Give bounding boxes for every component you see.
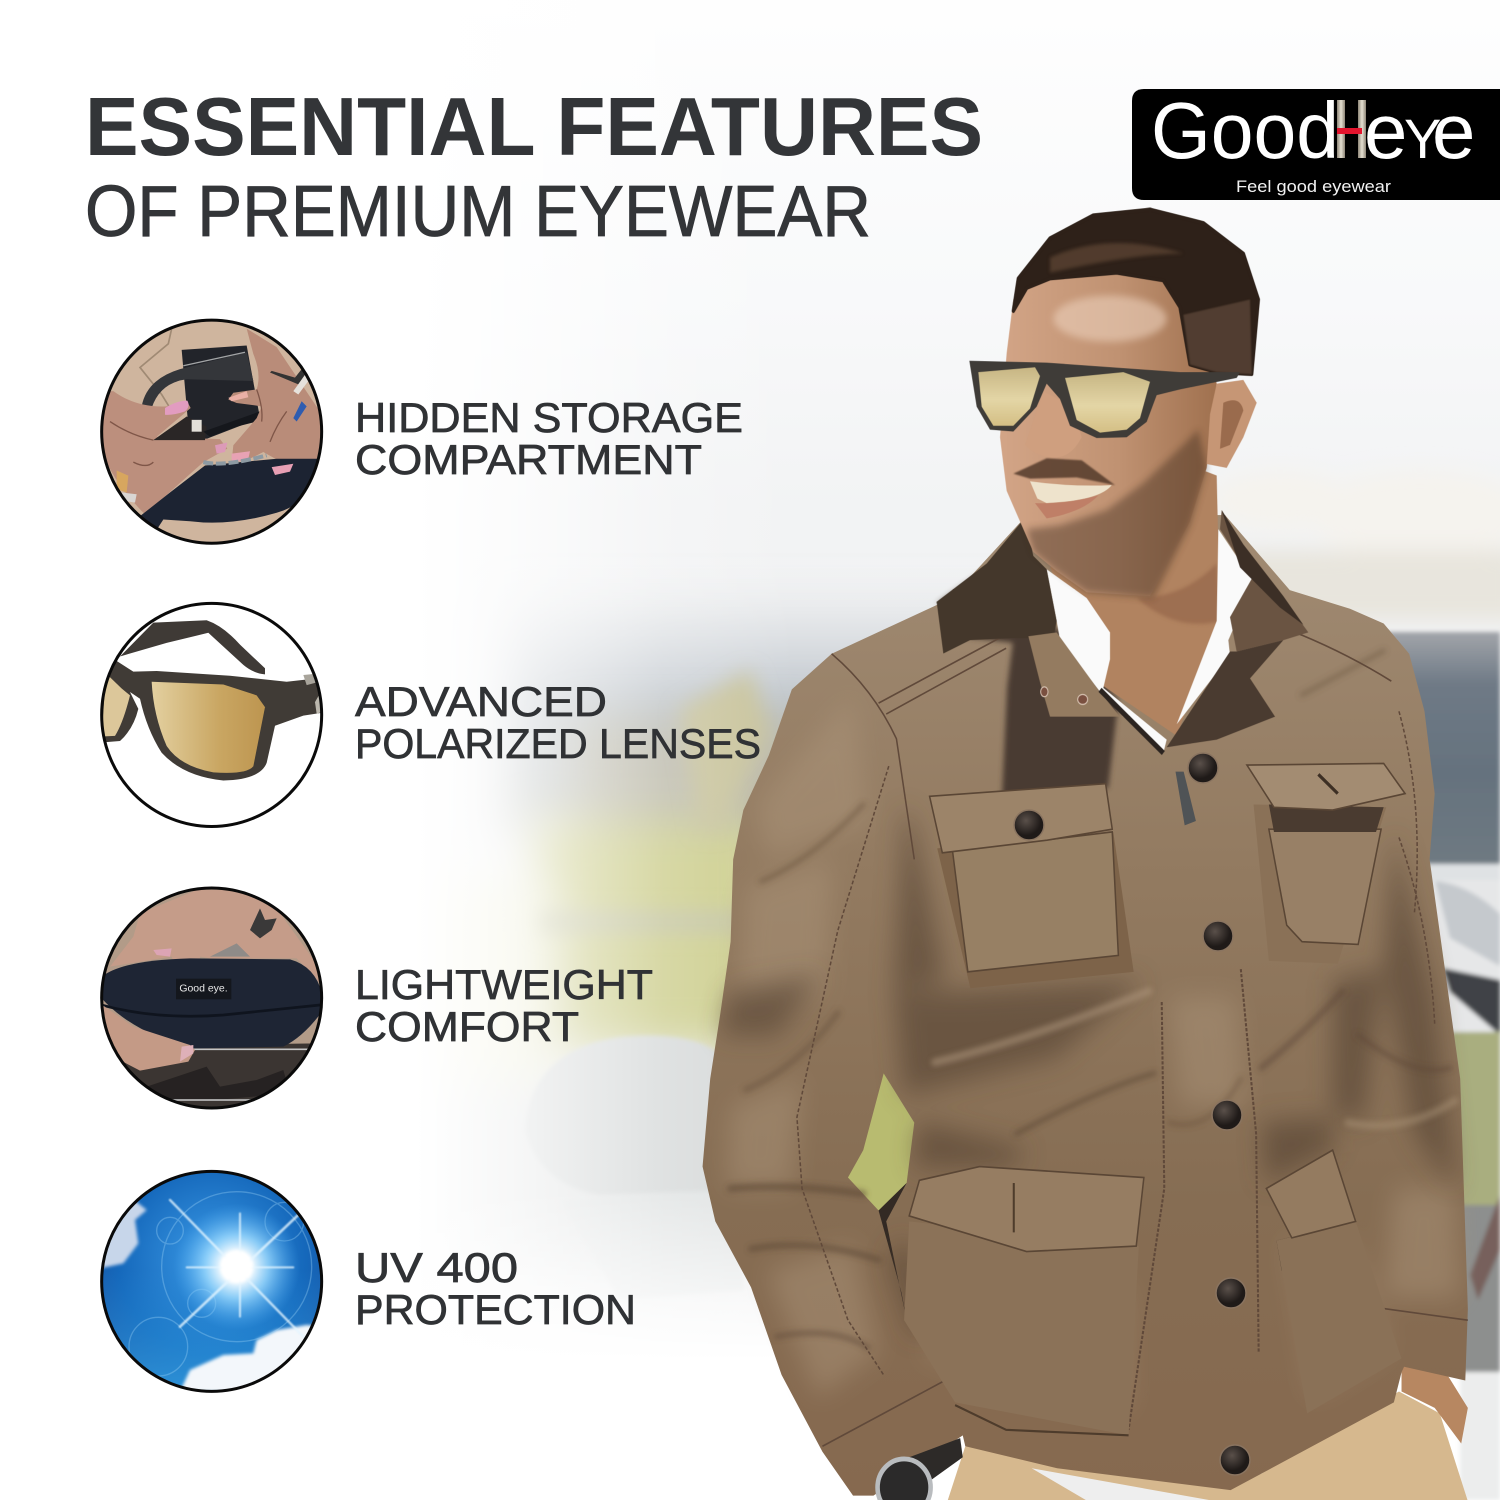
label [355,394,743,483]
brand logo [1132,86,1500,200]
brand logo: e [1364,87,1407,175]
brand logo: Y [1404,107,1441,170]
title line 1: ESSENTIAL FEATURES [85,80,983,173]
label: UV 400 [355,1244,518,1291]
label [355,678,761,767]
collar snaps [1041,687,1088,704]
brand logo: Good [1151,86,1339,175]
jacket buttons [1014,753,1250,1475]
stubble [1027,430,1207,598]
model sunglasses [969,361,1240,438]
label: COMFORT [355,1003,579,1050]
right collar [1220,510,1308,652]
icon: sun in blue sky [100,1170,327,1393]
label: COMPARTMENT [355,436,702,483]
icon: hands holding lightweight case [100,887,323,1110]
wristwatch [878,1438,963,1500]
feature: hidden storage compartment [100,317,743,547]
jacket stitching [797,629,1468,1446]
label: HIDDEN STORAGE [355,394,743,441]
jacket soft shadow areas [720,805,1455,1337]
nose [1025,391,1082,458]
icon: hands holding lightweight case: Good eye. [179,983,228,994]
label: LIGHTWEIGHT [355,961,653,1008]
left collar [937,518,1057,653]
jacket base [703,515,1468,1496]
shirt collar [1047,529,1252,753]
trousers [947,1391,1468,1500]
label: PROTECTION [355,1286,636,1333]
upper left pocket [930,784,1134,988]
forehead highlight [1053,296,1167,342]
lower right pocket [1266,1150,1402,1413]
label [355,1244,636,1333]
right collar shadow line [1222,510,1303,625]
icon: hands opening glasses case [100,317,327,547]
brand logo: e [1432,87,1475,175]
gap between arm and torso showing grass [848,1073,914,1210]
title line 2: OF PREMIUM EYEWEAR [85,172,871,252]
feature: lightweight comfort [100,887,653,1110]
head shadow on chest [937,570,1118,797]
zipper [1100,690,1163,753]
jacket, trousers and hand [703,515,1468,1500]
mouth [1030,481,1112,518]
label [355,961,653,1050]
ear [1207,380,1257,468]
label: POLARIZED LENSES [355,720,761,767]
shadow under pocket flaps [924,805,1384,1282]
upper right pocket [1247,763,1405,964]
hair [1013,210,1258,374]
jacket light areas [726,695,1460,1408]
neck [1050,468,1220,736]
feature: advanced polarized lenses [100,601,761,831]
right hand [1402,1364,1468,1444]
label: ADVANCED [355,678,607,725]
head, neck and collar [937,210,1308,753]
icon: sunglasses close-up [100,601,325,831]
lower left pocket [904,1167,1144,1435]
brand logo: Feel good eyewear [1236,177,1391,196]
right collar flap and shadow [1167,640,1283,747]
model wearing sunglasses and olive jacket [703,210,1468,1500]
face [1000,246,1217,596]
zipper pull [1176,772,1196,825]
jacket folds [731,651,1455,1348]
feature: UV 400 protection [100,1170,636,1393]
left collar flap [1028,632,1120,717]
title [85,80,983,252]
moustache [1013,458,1115,485]
